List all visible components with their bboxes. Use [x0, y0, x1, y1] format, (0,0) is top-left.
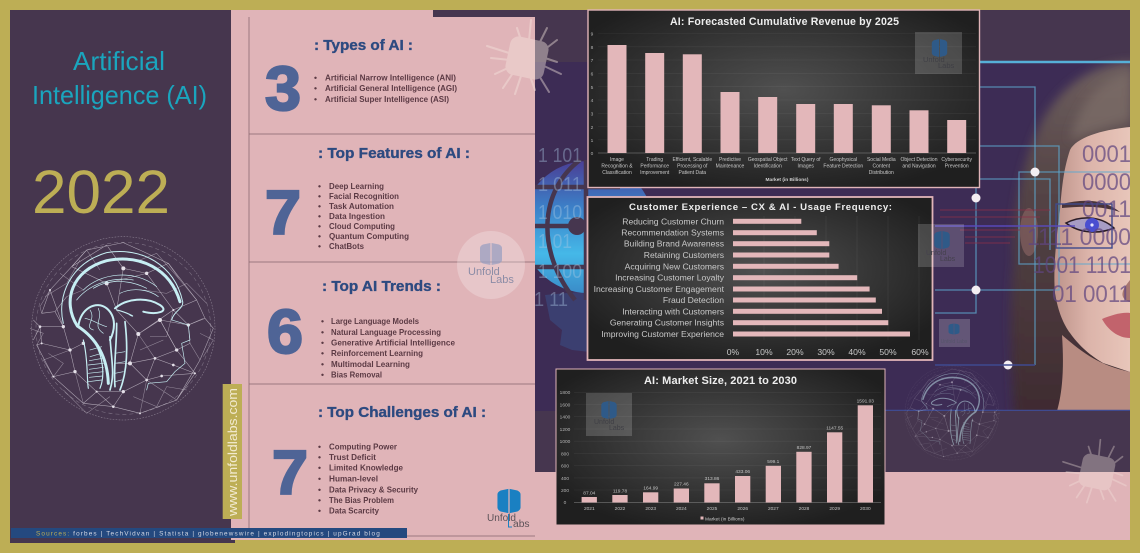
website strip: www.unfoldlabs.com: [225, 388, 240, 517]
pink content panel: [231, 10, 535, 540]
Unfold Labs logo: Unfold: [487, 513, 516, 524]
category labels: Text Query of: [791, 157, 821, 163]
faint brain motif: [905, 366, 1000, 460]
data labels: 433.06: [735, 469, 750, 475]
chart: customer experience usage frequency: [588, 197, 932, 360]
list: [318, 441, 418, 516]
binary digits left of the charts: 1 11: [534, 289, 568, 311]
category labels: Building Brand Awareness: [624, 239, 724, 249]
title: Artificial Intelligence (AI): [32, 46, 207, 110]
list: •: [318, 231, 321, 241]
y axis labels: 2: [591, 125, 594, 131]
data labels: 1147.55: [826, 426, 844, 432]
year labels: 2029: [829, 506, 840, 512]
binary digits over the face: 01 0011: [1052, 281, 1131, 308]
list: ChatBots: [329, 241, 364, 251]
thick blue line: [980, 61, 1130, 63]
list: •: [318, 452, 321, 462]
y axis labels: 6: [591, 72, 594, 78]
list: •: [318, 495, 321, 505]
watermark circle: Unfold Labs: [457, 231, 525, 299]
binary digits left of the charts: 1 010: [538, 202, 582, 224]
list: •: [318, 201, 321, 211]
list: •: [314, 72, 317, 82]
heading: : Top Features of AI :: [318, 145, 470, 162]
category labels: Social Media: [867, 157, 896, 163]
category labels: [601, 157, 972, 176]
watermark beside customer experience chart: Labs: [940, 256, 956, 263]
sources bar: [11, 528, 407, 538]
list: Artificial Super Intelligence (ASI): [325, 94, 449, 104]
list: •: [321, 327, 324, 337]
data labels: 87.04: [583, 490, 596, 496]
binary digits over the face: 0000: [1082, 169, 1131, 196]
sources bar: Sources: forbes | TechVidvan | Statista | globenewswire | explodingtopics | upGrad blog: [36, 530, 381, 538]
bars: [733, 219, 910, 336]
year labels: 2023: [645, 506, 656, 512]
year labels: 2024: [676, 506, 687, 512]
category labels: Recommendation Systems: [621, 228, 724, 238]
binary digits over the face: [1027, 141, 1131, 308]
percentage axis: 10%: [755, 347, 773, 357]
list: •: [321, 359, 324, 369]
right section background: [433, 10, 1130, 472]
percentage axis: 50%: [879, 347, 897, 357]
category labels: Geophysical: [830, 157, 857, 163]
list: Trust Deficit: [329, 452, 376, 462]
list: Quantum Computing: [329, 231, 409, 241]
category labels: Generating Customer Insights: [610, 318, 724, 328]
brain and network sphere illustration: [30, 237, 215, 420]
binary digits left of the charts: 1 101: [538, 145, 582, 167]
chart: market size 2021 to 2030: [556, 369, 885, 525]
y axis labels: 1800: [560, 390, 571, 396]
chip decoration top right: [487, 20, 561, 94]
chart title: AI: Market Size, 2021 to 2030: [644, 375, 797, 387]
data labels: 227.46: [674, 482, 689, 488]
y axis labels: 600: [561, 464, 569, 470]
binary digits left of the charts: 1 01: [538, 231, 572, 253]
year labels: 2025: [707, 506, 718, 512]
list: •: [318, 211, 321, 221]
big number 7: 7: [272, 439, 308, 508]
binary digits over the face: 0001: [1082, 141, 1131, 168]
list: Natural Language Processing: [331, 327, 441, 337]
watermark: Labs: [609, 425, 625, 432]
category labels: Performance: [640, 164, 669, 170]
category labels: Images: [797, 164, 814, 170]
data labels: 1591.03: [857, 398, 874, 404]
data labels: 313.86: [705, 476, 720, 482]
eye highlight rectangle: [1056, 204, 1112, 248]
y axis labels: 1000: [560, 439, 571, 445]
percentage axis: 40%: [848, 347, 866, 357]
title: Artificial Intelligence (AI): Intelligence (AI): [32, 80, 207, 110]
faded red code lines: [940, 210, 1050, 243]
percentage axis: 60%: [911, 347, 929, 357]
y axis labels: 9: [591, 32, 594, 38]
list: Task Automation: [329, 201, 394, 211]
panel dividers: [249, 17, 535, 536]
list: Computing Power: [329, 441, 398, 451]
list: Bias Removal: [331, 369, 382, 379]
dim blue lines: [885, 365, 1130, 410]
y axis labels: 1200: [560, 427, 571, 433]
category labels: Maintenance: [716, 164, 745, 170]
eye: [1066, 218, 1114, 232]
category labels: Increasing Customer Engagement: [594, 284, 725, 294]
category labels: Processing of: [677, 164, 708, 170]
y axis labels: 0: [564, 500, 567, 506]
watermark: Labs: [938, 61, 955, 70]
y axis labels: 800: [561, 452, 569, 458]
portrait of a woman with circuit overlay: [885, 62, 1135, 420]
list: Data Ingestion: [329, 211, 385, 221]
category labels: Efficient, Scalable: [672, 157, 712, 163]
percentage axis: 0%: [727, 347, 740, 357]
list: •: [318, 463, 321, 473]
category labels: Object Detection: [901, 157, 938, 163]
watermark: Unfold: [923, 55, 945, 64]
watermark: [586, 393, 632, 436]
data labels: 599.1: [767, 459, 780, 465]
chart title: AI: Forecasted Cumulative Revenue by 2025: [670, 16, 899, 28]
binary digits left of the charts: 1 100: [538, 261, 582, 283]
chart title: Customer Experience – CX & AI - Usage Frequency:: [629, 202, 892, 213]
category labels: Content: [873, 164, 891, 170]
year labels: [584, 506, 871, 512]
year labels: 2022: [615, 506, 626, 512]
bottom pink band: [535, 472, 1130, 540]
website strip: [223, 384, 242, 519]
hair: [1011, 62, 1135, 420]
eyebrow: [1062, 201, 1120, 212]
binary digits over the face: 1111 0000: [1027, 224, 1131, 251]
category labels: Acquiring New Customers: [625, 261, 724, 271]
section: top challenges of AI: [272, 404, 486, 516]
list: Cloud Computing: [329, 221, 395, 231]
list: •: [318, 474, 321, 484]
list: Limited Knowledge: [329, 463, 403, 473]
percentage axis: [727, 347, 929, 357]
blue light streak: [935, 225, 1075, 227]
section: top AI trends: [267, 278, 455, 379]
category labels: and Navigation: [902, 164, 936, 170]
section: types of AI: [265, 37, 457, 124]
list: Human-level: [329, 474, 378, 484]
category labels: Fraud Detection: [663, 295, 724, 305]
list: Artificial General Intelligence (AGI): [325, 83, 457, 93]
category labels: Identification: [754, 164, 782, 170]
list: Multimodal Learning: [331, 359, 410, 369]
list: •: [321, 337, 324, 347]
year labels: 2021: [584, 506, 595, 512]
list: [314, 72, 457, 104]
list: •: [321, 348, 324, 358]
list: Data Privacy & Security: [329, 484, 418, 494]
neck and shoulder: [1057, 335, 1130, 411]
category labels: Prevention: [945, 164, 969, 170]
list: Artificial Narrow Intelligence (ANI): [325, 72, 456, 82]
data labels: 164.99: [643, 486, 658, 492]
data labels: 119.78: [613, 488, 627, 494]
year labels: 2028: [799, 506, 810, 512]
nose shadow: [1122, 280, 1130, 302]
list: •: [318, 191, 321, 201]
heading: : Top AI Trends :: [322, 278, 441, 295]
big number 7: 7: [265, 179, 301, 248]
axis line: [598, 152, 976, 154]
category labels: Recognition &: [601, 164, 633, 170]
list: •: [318, 441, 321, 451]
list: •: [314, 83, 317, 93]
list: Generative Artificial Intelligence: [331, 337, 455, 347]
list: •: [318, 484, 321, 494]
list: Deep Learning: [329, 181, 384, 191]
circuit lines: [935, 87, 1130, 365]
list: •: [314, 94, 317, 104]
category labels: Classification: [602, 170, 632, 176]
category labels: Distribution: [869, 170, 894, 176]
category labels: Predictive: [719, 157, 741, 163]
list: The Bias Problem: [329, 495, 394, 505]
y axis labels: 0: [591, 151, 594, 157]
list: •: [321, 316, 324, 326]
data labels: 828.97: [797, 445, 812, 451]
axis title: Market (in Billions): [766, 177, 809, 183]
y axis labels: 400: [561, 476, 569, 482]
watermark circle: Unfold Labs: Unfold: [468, 266, 500, 278]
category labels: Cybersecurity: [941, 157, 972, 163]
gridlines: [598, 34, 976, 140]
binary digits left of the charts: 1 011: [538, 174, 582, 196]
lips: [1102, 313, 1130, 338]
watermark: [915, 32, 962, 74]
list: [321, 316, 455, 379]
category labels: Feature Detection: [823, 164, 863, 170]
y axis labels: [591, 32, 594, 157]
category labels: Image: [610, 157, 624, 163]
percentage axis: 20%: [786, 347, 804, 357]
y axis labels: 4: [591, 98, 594, 104]
category labels: Patient Data: [679, 170, 706, 176]
chip decoration bottom right: [1063, 440, 1126, 503]
section: top features of AI: [265, 145, 470, 251]
gear shape under the globe: [545, 290, 600, 352]
year labels: 2027: [768, 506, 779, 512]
list: Reinforcement Learning: [331, 348, 423, 358]
face: [1054, 127, 1130, 372]
y axis labels: 200: [561, 488, 569, 494]
percentage axis: 30%: [817, 347, 835, 357]
category labels: Retaining Customers: [644, 250, 724, 260]
list: •: [318, 241, 321, 251]
title: Artificial Intelligence (AI): Artificial: [73, 46, 165, 76]
Unfold Labs logo: [487, 489, 530, 530]
binary digits left of the charts: [534, 145, 582, 311]
bars: [608, 45, 966, 153]
category labels: Geospatial Object: [748, 157, 788, 163]
legend: Market (in Billions): [705, 516, 745, 522]
category labels: Improvement: [640, 170, 670, 176]
y axis labels: 7: [591, 58, 594, 64]
y axis labels: [560, 390, 571, 506]
list: •: [321, 369, 324, 379]
category labels: [594, 216, 725, 339]
category labels: Reducing Customer Churn: [622, 216, 724, 226]
watermark beside customer experience chart: [918, 224, 964, 267]
list: Data Scarcity: [329, 506, 379, 516]
category labels: Interacting with Customers: [622, 306, 724, 316]
year labels: 2030: [860, 506, 871, 512]
heading: : Types of AI :: [314, 37, 413, 54]
list: •: [318, 506, 321, 516]
watermark: Unfold: [594, 419, 614, 426]
list: •: [318, 181, 321, 191]
binary digits over the face: 0011: [1082, 196, 1131, 223]
y axis labels: 1600: [560, 402, 571, 408]
y axis labels: 1400: [560, 414, 571, 420]
y axis labels: 1: [591, 138, 594, 144]
category labels: Trading: [646, 157, 663, 163]
watermark beside customer experience chart: Unfold: [926, 250, 946, 257]
junction dots: [972, 168, 1040, 370]
list: •: [318, 221, 321, 231]
y axis labels: 5: [591, 85, 594, 91]
Unfold Labs logo: abs: [513, 519, 530, 530]
y axis labels: 8: [591, 45, 594, 51]
data labels: [583, 398, 874, 496]
list: Facial Recognition: [329, 191, 399, 201]
bars: [582, 405, 873, 502]
big number 3: 3: [265, 55, 301, 124]
category labels: Increasing Customer Loyalty: [615, 273, 725, 283]
watermark circle: Unfold Labs: Labs: [490, 274, 514, 286]
big number 6: 6: [267, 298, 303, 367]
chart: forecasted cumulative revenue: [588, 10, 980, 188]
ear: [1020, 208, 1038, 256]
year labels: 2026: [737, 506, 748, 512]
year: 2022: 2022: [32, 158, 170, 226]
left sidebar background: [10, 10, 235, 543]
y axis labels: 3: [591, 112, 594, 118]
globe with binary digits: [522, 145, 654, 352]
axis line: [574, 502, 881, 504]
hair highlight: [1072, 76, 1130, 138]
list: [318, 181, 409, 251]
heading: : Top Challenges of AI :: [318, 404, 486, 421]
gridlines: [574, 392, 881, 490]
gridlines: [764, 216, 919, 340]
category labels: Improving Customer Experience: [601, 329, 724, 339]
small watermark box: Unfold Labs: [941, 339, 968, 345]
list: Large Language Models: [331, 316, 419, 326]
small watermark box: [939, 319, 970, 347]
